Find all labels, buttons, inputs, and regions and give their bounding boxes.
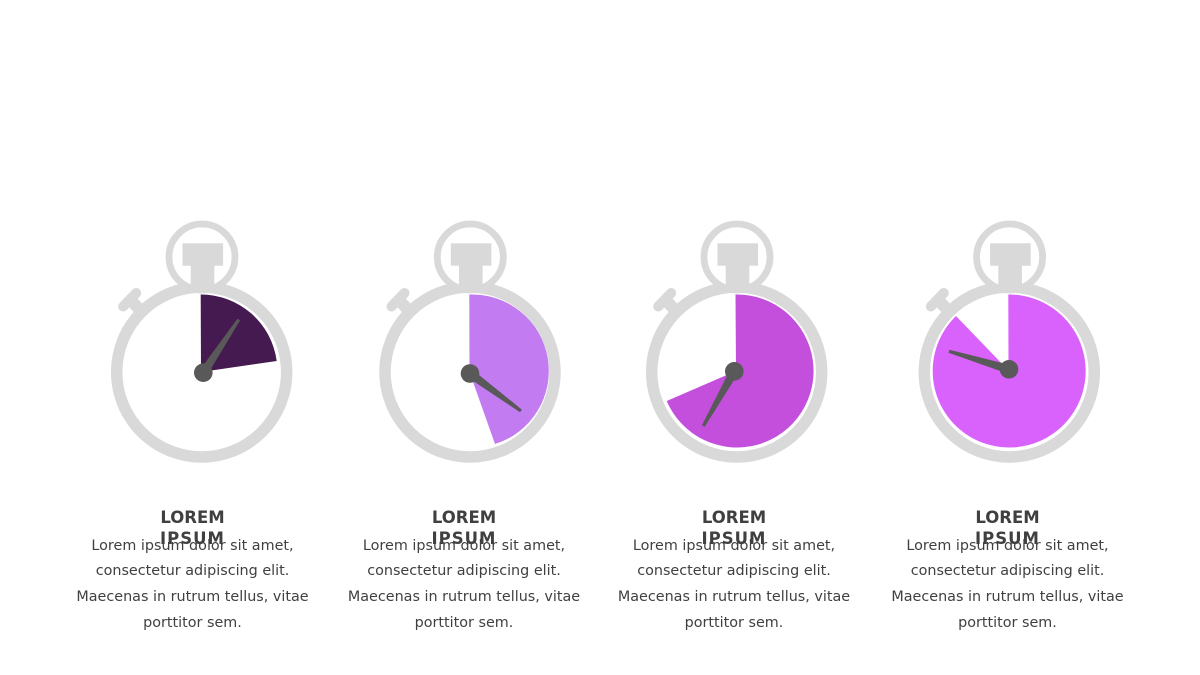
stopwatch 1 body xyxy=(117,224,287,457)
heading 2 xyxy=(432,508,496,548)
stopwatch 4 hand xyxy=(948,350,1018,379)
stopwatch 2 xyxy=(385,224,555,457)
body text 3: Maecenas in rutrum tellus, vitae xyxy=(618,589,850,605)
text block 3 xyxy=(618,508,850,631)
body text 1: consectetur adipiscing elit. xyxy=(96,563,289,579)
body text 3: porttitor sem. xyxy=(685,615,783,631)
stopwatch 2 body xyxy=(385,224,555,457)
stopwatch 4 wedge xyxy=(933,294,1086,447)
heading 4: IPSUM xyxy=(975,528,1040,548)
body text 1: porttitor sem. xyxy=(143,615,242,631)
stopwatch 3 body xyxy=(652,224,822,457)
body text 1: Maecenas in rutrum tellus, vitae xyxy=(76,589,309,605)
body text 4: porttitor sem. xyxy=(958,615,1057,631)
body text 4: Lorem ipsum dolor sit amet, xyxy=(906,538,1109,554)
heading 2: IPSUM xyxy=(432,528,496,548)
body text 3 xyxy=(618,538,850,631)
text block 4 xyxy=(891,508,1124,631)
body text 3: Lorem ipsum dolor sit amet, xyxy=(633,538,835,554)
body text 1: Lorem ipsum dolor sit amet, xyxy=(91,538,294,554)
stopwatch 2 hand xyxy=(461,364,522,412)
stopwatch 1 xyxy=(117,224,287,457)
heading 2: LOREM xyxy=(432,508,496,527)
heading 1: LOREM xyxy=(160,508,225,527)
body text 2: consectetur adipiscing elit. xyxy=(367,563,561,579)
heading 4: LOREM xyxy=(975,508,1040,527)
heading 1 xyxy=(160,508,225,548)
body text 4: Maecenas in rutrum tellus, vitae xyxy=(891,589,1124,605)
heading 3: IPSUM xyxy=(702,528,766,548)
text block 2 xyxy=(348,508,580,631)
body text 2: Lorem ipsum dolor sit amet, xyxy=(363,538,565,554)
heading 3: LOREM xyxy=(702,508,766,527)
heading 4 xyxy=(975,508,1040,548)
stopwatch 3 hand xyxy=(702,362,744,427)
stopwatch 2 wedge xyxy=(469,294,549,444)
stopwatch 3 xyxy=(652,224,822,457)
body text 1 xyxy=(76,538,309,631)
body text 2: Maecenas in rutrum tellus, vitae xyxy=(348,589,580,605)
body text 2 xyxy=(348,538,580,631)
body text 4 xyxy=(891,538,1124,631)
heading 1: IPSUM xyxy=(160,528,225,548)
stopwatch 1 hand xyxy=(194,319,240,382)
stopwatch 3 wedge xyxy=(667,294,814,447)
body text 4: consectetur adipiscing elit. xyxy=(911,563,1104,579)
stopwatch 4 xyxy=(924,224,1094,457)
body text 3: consectetur adipiscing elit. xyxy=(637,563,831,579)
body text 2: porttitor sem. xyxy=(415,615,513,631)
heading 3 xyxy=(702,508,766,548)
text block 1 xyxy=(76,508,309,631)
stopwatch 1 wedge xyxy=(201,294,277,372)
stopwatch 4 body xyxy=(924,224,1094,457)
